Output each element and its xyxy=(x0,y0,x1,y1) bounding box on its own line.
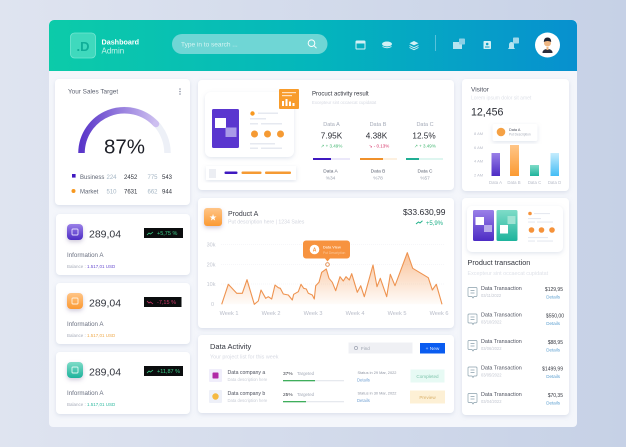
divider xyxy=(434,35,437,51)
main dashboard panel xyxy=(49,20,577,427)
progress labels: %78 xyxy=(373,176,383,182)
row 1 xyxy=(468,286,563,300)
y axis labels: 20k xyxy=(207,262,216,268)
amount: $33.630,99 xyxy=(403,207,446,217)
stats: data B xyxy=(366,122,389,148)
progress labels: %34 xyxy=(326,176,336,182)
progress labels: Data B xyxy=(371,168,385,174)
row 4: 03/05/2022 xyxy=(481,372,502,378)
bars xyxy=(492,145,559,176)
stats: data C: 12.5% xyxy=(412,132,436,140)
legend: market: Market xyxy=(80,190,99,196)
stats: data B: Data B xyxy=(370,122,387,128)
panel: visitor xyxy=(462,79,569,191)
icon xyxy=(209,390,222,403)
tooltip xyxy=(303,240,350,262)
icon: star: ★ xyxy=(209,212,217,222)
row 2: Data Transaction xyxy=(481,312,522,318)
y axis labels: 10k xyxy=(207,282,216,288)
legend: business: Business xyxy=(80,175,104,181)
panel: your sales target xyxy=(55,79,190,205)
value: 289,04 xyxy=(89,366,121,378)
panel: information A teal xyxy=(56,352,190,414)
y axis labels: 30k xyxy=(207,242,216,248)
tooltip xyxy=(492,124,538,141)
y axis labels: 2 AM xyxy=(474,172,483,178)
icon: orange report xyxy=(279,89,299,109)
row 5: 03/04/2022 xyxy=(481,399,502,404)
label: Information A xyxy=(67,321,104,328)
icon: window xyxy=(356,41,365,49)
row: company a: Status in 29 Mar, 2022 xyxy=(358,370,396,375)
legend: business: 543 xyxy=(162,175,173,181)
heading: Product transaction xyxy=(468,258,530,267)
stats: data C xyxy=(412,122,436,148)
row: company a xyxy=(209,369,444,382)
delta xyxy=(416,221,444,227)
row 5: Details xyxy=(546,400,561,406)
row 4 xyxy=(468,366,563,379)
marker xyxy=(326,263,329,266)
progress labels xyxy=(323,168,433,182)
row 3: 03/06/2022 xyxy=(481,346,502,351)
stats: data C: ↗ + 3.49% xyxy=(414,144,436,148)
row: company b: 25% xyxy=(283,392,293,398)
x axis labels: Data A xyxy=(489,180,502,185)
legend: market: 944 xyxy=(162,190,173,196)
legend: market: 7631 xyxy=(124,190,138,196)
row 3 xyxy=(468,339,563,352)
row: company b: Data description here xyxy=(228,398,268,403)
row: company b: Status in 30 Mar, 2022 xyxy=(358,390,396,396)
heading: Data Activity xyxy=(210,342,252,351)
row 3: Data Transaction xyxy=(481,339,522,345)
icon xyxy=(67,224,83,240)
badge: +5,75 % xyxy=(157,231,177,237)
row 2: 03/10/2022 xyxy=(481,320,502,324)
menu dots xyxy=(179,88,181,95)
header bar xyxy=(49,20,577,71)
legend: business: 224 xyxy=(106,175,117,181)
tooltip: A xyxy=(313,248,317,254)
icon: mail xyxy=(453,38,465,49)
find box: Find xyxy=(361,346,370,351)
icon xyxy=(67,362,83,378)
icon: star xyxy=(204,208,222,226)
x axis labels xyxy=(489,180,561,185)
badge: +11,87 % xyxy=(157,369,180,375)
heading: Your Sales Target xyxy=(68,88,118,96)
brand title: Dashboard xyxy=(102,38,139,46)
x axis labels: Data D xyxy=(548,180,561,185)
stats: data A: 7.95K xyxy=(321,132,343,140)
gridlines xyxy=(221,244,444,284)
subheading: Your project list for this week xyxy=(210,354,279,360)
row 1: 03/11/2022 xyxy=(481,293,502,298)
search box: Type in to search ... xyxy=(181,42,238,48)
panel: product activity result xyxy=(198,80,454,190)
y axis labels xyxy=(474,131,483,178)
tooltip: Put Description xyxy=(509,132,531,136)
y axis labels xyxy=(207,242,216,308)
row: company b: Preview xyxy=(419,395,436,400)
search box xyxy=(172,34,328,54)
row 4: $1499,99 xyxy=(542,366,563,372)
balance: Balance : 1.517,01 USD xyxy=(67,333,116,338)
value: 289,04 xyxy=(89,298,121,310)
row 3: Details xyxy=(546,348,561,352)
row: company a: 37% xyxy=(283,371,293,377)
value: 12,456 xyxy=(471,106,504,118)
heading: Product A xyxy=(228,211,259,218)
logo: .D xyxy=(76,39,90,54)
row 1: $129,95 xyxy=(545,287,563,293)
y axis labels: 8 AM xyxy=(474,131,483,136)
heading: Procuct activity result xyxy=(312,92,369,98)
icon: bell xyxy=(508,38,519,49)
logo xyxy=(70,33,96,58)
progress bars xyxy=(313,158,443,160)
legend: business: 775 xyxy=(148,175,158,181)
description: Put description here | 1234 Sales xyxy=(228,220,305,226)
y axis labels: 6 AM xyxy=(474,145,483,150)
row 2: $550,00 xyxy=(546,314,564,320)
find box xyxy=(348,342,412,354)
row: company b: Targeted xyxy=(297,392,315,397)
row 1: Details xyxy=(546,294,561,300)
y axis labels: 0 xyxy=(211,302,214,308)
icon xyxy=(67,293,83,309)
gauge value: 87% xyxy=(104,136,145,158)
legend: market: 510 xyxy=(106,190,117,196)
illustration card xyxy=(205,92,294,157)
legend strip xyxy=(206,166,296,180)
row 4: Data Transaction xyxy=(481,366,522,372)
legend: market xyxy=(72,189,173,196)
gauge xyxy=(82,110,168,153)
tooltip: Data A xyxy=(509,128,521,132)
row: company a: Data company a xyxy=(228,370,265,376)
row: company a: Targeted xyxy=(297,371,315,376)
progress labels: Data A xyxy=(323,168,338,174)
area chart xyxy=(222,253,442,304)
x axis labels: Week 3 xyxy=(304,311,322,317)
legend: business xyxy=(72,174,173,181)
tooltip: Data View xyxy=(323,246,341,250)
label: Information A xyxy=(67,252,104,259)
row: company b: Details xyxy=(357,398,370,403)
balance: Balance : 1.517,01 USD xyxy=(67,402,116,407)
stats: data A: Data A xyxy=(323,122,340,128)
stats: data C: Data C xyxy=(416,122,434,128)
row 2: Details xyxy=(546,321,561,326)
row: company a: Details xyxy=(357,378,370,382)
row 5: Data Transaction xyxy=(481,392,522,398)
legend: market: 662 xyxy=(148,190,158,196)
badge: -7,15 % xyxy=(157,300,176,306)
illustration card xyxy=(467,206,563,252)
icon: layers xyxy=(410,41,418,50)
delta: +5,9% xyxy=(426,221,444,227)
stats: data B: ↘ - 0.13% xyxy=(369,144,389,148)
icon: contact xyxy=(484,41,491,49)
stats: data A: ↗ + 3.49% xyxy=(321,144,342,148)
row 1: Data Transaction xyxy=(481,286,522,292)
stats: data A xyxy=(321,122,343,148)
row 2 xyxy=(468,312,564,326)
row: company a: Data description here xyxy=(228,377,268,382)
x axis labels: Week 5 xyxy=(388,311,406,317)
icon: database xyxy=(382,42,392,48)
x axis labels: Week 1 xyxy=(220,311,238,317)
label: Information A xyxy=(67,390,104,397)
row: company b: Data company b xyxy=(228,391,265,397)
balance: Balance : 1.517,01 USD xyxy=(67,264,116,269)
panel: product A chart xyxy=(198,198,454,328)
row 3: $88,95 xyxy=(548,340,563,346)
x axis labels: Week 2 xyxy=(262,311,280,317)
progress labels: %57 xyxy=(420,176,430,182)
row 5: $70,35 xyxy=(548,393,563,399)
subheading: Excepteur sint occaecat cupidatat xyxy=(312,100,377,105)
value: 289,04 xyxy=(89,228,121,240)
x axis labels: Data B xyxy=(507,180,521,185)
stats: data B: 4.38K xyxy=(366,132,388,140)
panel: information A orange xyxy=(56,283,190,344)
heading: Visitor xyxy=(471,86,490,94)
new button: + New xyxy=(426,346,440,352)
tooltip: Put Description xyxy=(323,251,346,255)
avatar xyxy=(535,32,560,58)
new button xyxy=(420,343,445,354)
row 5 xyxy=(468,392,563,406)
panel: data activity xyxy=(198,335,454,413)
y axis labels: 4 AM xyxy=(474,158,483,164)
brand title xyxy=(102,38,139,56)
subheading: Lorem ipsum dolor sit amet xyxy=(471,96,532,102)
x axis labels: Week 6 xyxy=(430,311,448,317)
progress labels: Data C xyxy=(418,168,433,174)
x axis labels xyxy=(220,311,448,317)
icon xyxy=(209,369,222,382)
panel: product transaction xyxy=(462,198,569,415)
panel: information A purple xyxy=(56,214,190,275)
brand title: Admin xyxy=(102,46,124,56)
x axis labels: Week 4 xyxy=(346,311,364,317)
legend: business: 2452 xyxy=(124,175,138,181)
row: company a: Completed xyxy=(416,374,439,379)
row: company b xyxy=(209,390,445,404)
subheading: Excepteur sint occaecat cupidatat xyxy=(468,271,549,277)
x axis labels: Data C xyxy=(528,180,541,185)
row 4: Details xyxy=(546,374,561,379)
